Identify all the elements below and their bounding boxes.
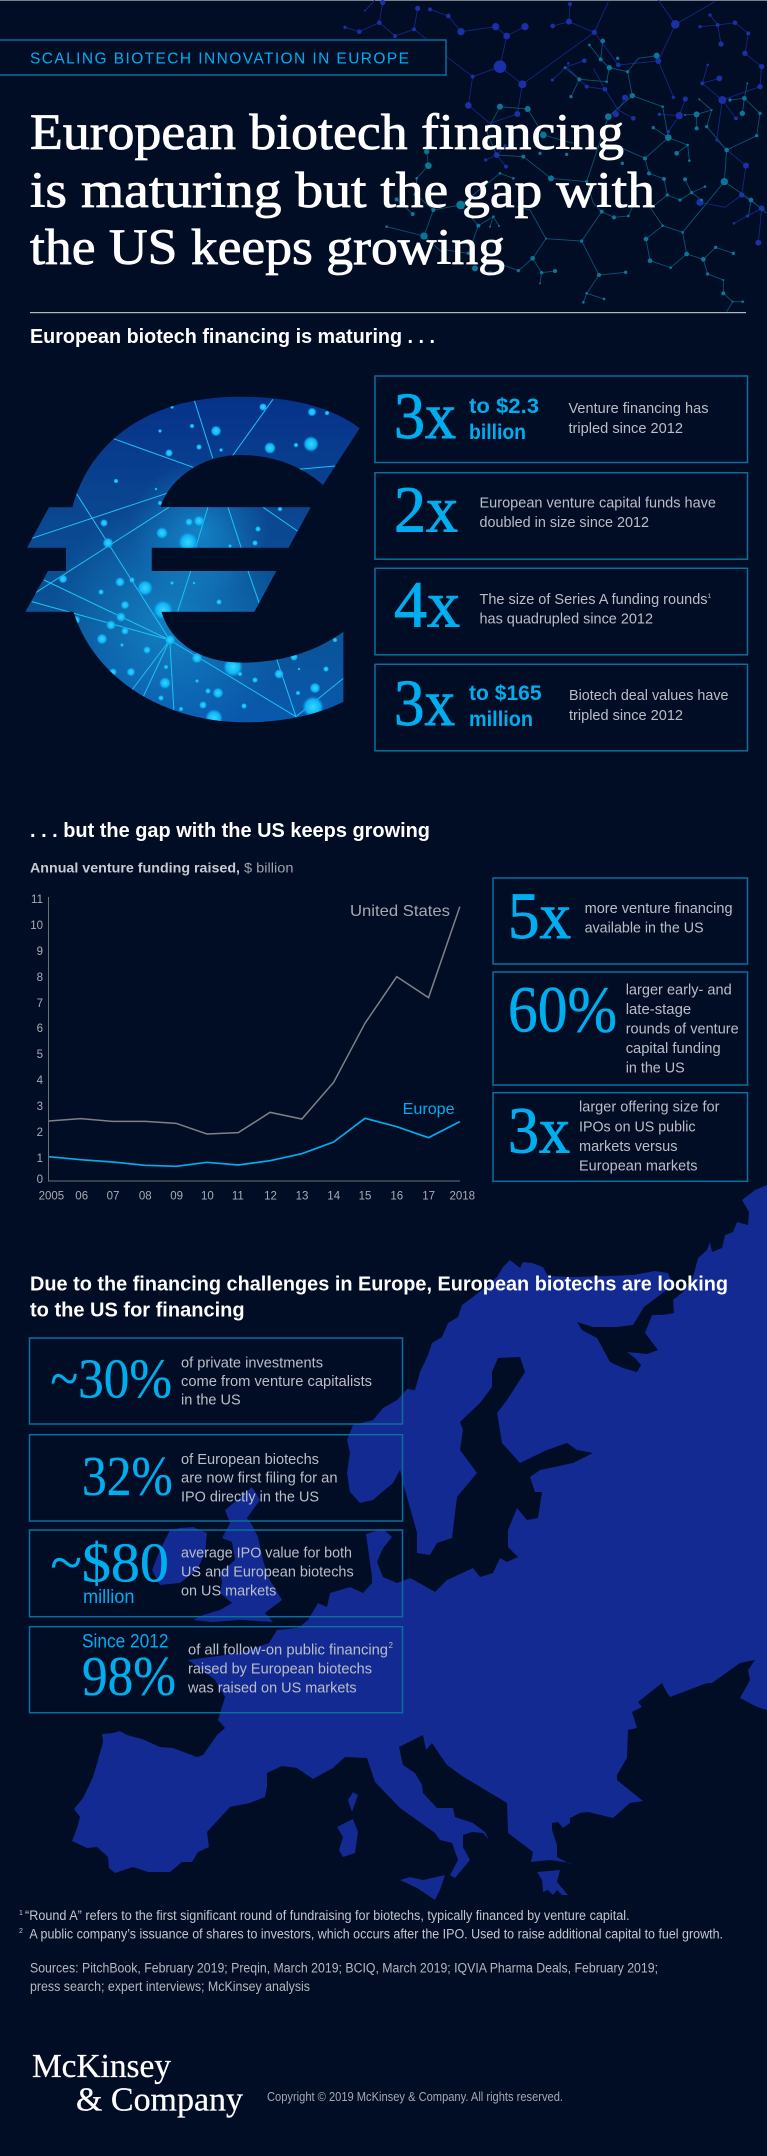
y axis labels: 7	[37, 998, 43, 1010]
y axis labels: 10	[30, 920, 43, 932]
heading: financing challenges: to the US for financing	[30, 1300, 245, 1322]
stat: 60%: late-stage	[626, 1001, 691, 1018]
Sicily	[400, 1875, 445, 1900]
stat: ~30%	[30, 1338, 402, 1424]
stat: 3x IPO: larger offering size for	[579, 1099, 720, 1116]
stat: ~30%: come from venture capitalists	[181, 1373, 372, 1390]
stat: venture financing: tripled since 2012	[568, 420, 683, 437]
map of Europe	[72, 1185, 767, 1900]
footnotes: 2	[19, 1928, 23, 1935]
stat: 98%: 98%	[82, 1646, 176, 1708]
stat: 60%: rounds of venture	[626, 1020, 739, 1037]
stat: deal values: 3x	[394, 667, 455, 740]
stat: 98%: was raised on US markets	[187, 1679, 357, 1696]
stat: 60%: larger early- and	[626, 981, 732, 998]
x axis labels: 12	[264, 1190, 277, 1202]
logo: & Company	[76, 2082, 243, 2119]
heading: maturing: European biotech financing is maturing . . .	[30, 326, 435, 348]
sources	[30, 1960, 658, 1994]
tag banner	[0, 40, 446, 75]
stat: deal values: million	[469, 708, 533, 731]
y axis labels: 1	[37, 1153, 43, 1165]
stat: 32%: of European biotechs	[181, 1451, 319, 1468]
x axis labels: 13	[296, 1190, 308, 1202]
stat: 5x: more venture financing	[585, 900, 733, 917]
stat: series A	[375, 568, 748, 655]
stat: deal values: tripled since 2012	[569, 707, 683, 724]
stat: 60%: capital funding	[626, 1040, 721, 1057]
stat: venture financing	[375, 376, 748, 462]
x axis labels: 09	[170, 1190, 183, 1202]
x axis labels: 06	[75, 1190, 88, 1202]
sources: Sources: PitchBook, February 2019; Preqin, March 2019; BCIQ, March 2019; IQVIA Pharma Deals, February 2019;	[30, 1960, 658, 1975]
stat: 32%	[30, 1435, 402, 1521]
molecular network decoration	[343, 0, 767, 312]
stat: ~30%: of private investments	[181, 1354, 323, 1371]
series: Europe	[49, 1118, 460, 1166]
stat: 98%: of all follow-on public financing	[188, 1642, 388, 1659]
stat: ~$80 million: average IPO value for both	[181, 1545, 352, 1562]
stat: 60%	[493, 972, 748, 1085]
y axis labels: 2	[37, 1127, 43, 1139]
x axis labels: 11	[232, 1190, 244, 1202]
chart title: $ billion	[244, 860, 294, 876]
footnotes: A public company’s issuance of shares to investors, which occurs after the IPO. Used to raise additional capital to fuel growth.	[29, 1927, 723, 1942]
Peloponnese	[537, 1870, 568, 1895]
Ireland	[152, 1527, 207, 1585]
stat: 5x: available in the US	[585, 920, 704, 937]
stat: 32%: are now first filing for an	[181, 1470, 338, 1487]
footnotes: 1	[19, 1910, 23, 1917]
stat: 98%: 2	[388, 1641, 394, 1650]
euro symbol	[20, 390, 365, 740]
stat: 3x IPO: markets versus	[579, 1138, 678, 1155]
y axis labels: 5	[37, 1049, 43, 1061]
stat: ~30%: in the US	[181, 1392, 241, 1409]
x axis labels: 2005	[39, 1190, 64, 1202]
x axis labels: 17	[422, 1190, 435, 1202]
title	[30, 105, 655, 276]
network lines	[29, 399, 343, 717]
x axis labels: 15	[359, 1190, 371, 1202]
label: Europe: Europe	[403, 1101, 455, 1118]
y axis labels: 11	[31, 894, 43, 906]
stat: fund size	[375, 473, 748, 559]
stat: 3x IPO: IPOs on US public	[579, 1119, 696, 1136]
y axis labels	[30, 894, 44, 1186]
teal network	[385, 39, 767, 312]
title: is maturing but the gap with	[30, 163, 655, 219]
stat: 32%: IPO directly in the US	[181, 1488, 319, 1505]
y axis labels: 8	[37, 972, 43, 984]
x axis labels: 16	[390, 1190, 403, 1202]
stat: 3x IPO: European markets	[579, 1158, 698, 1175]
stat: fund size: European venture capital funds have	[480, 495, 716, 512]
heading: financing challenges: Due to the financing challenges in Europe, European biotechs are looking	[30, 1274, 728, 1296]
stat: 5x: 5x	[508, 880, 571, 953]
glowing dots	[58, 403, 338, 727]
series: United States	[49, 907, 460, 1134]
y axis labels: 9	[37, 946, 43, 958]
stat: 98%: Since 2012	[82, 1631, 168, 1652]
stat: deal values: Biotech deal values have	[569, 687, 728, 704]
logo: McKinsey	[32, 2048, 171, 2085]
x axis labels: 10	[201, 1190, 214, 1202]
x axis labels	[39, 1190, 475, 1202]
stat: 98%: raised by European biotechs	[188, 1660, 372, 1677]
label: United States: United States	[350, 903, 450, 920]
stat: ~$80 million: on US markets	[181, 1582, 276, 1599]
footnotes: “Round A” refers to the first significant round of fundraising for biotechs, typically financed by venture capital.	[25, 1908, 630, 1923]
stat: series A: has quadrupled since 2012	[480, 611, 653, 628]
tag banner: SCALING BIOTECH INNOVATION IN EUROPE	[30, 50, 409, 68]
stat: ~$80 million: US and European biotechs	[181, 1564, 354, 1581]
title: the US keeps growing	[30, 220, 505, 276]
stat: venture financing: to $2.3	[469, 395, 539, 418]
stat: venture financing: 3x	[394, 380, 456, 453]
chart title: Annual venture funding raised,	[30, 860, 240, 876]
stat: venture financing: billion	[469, 421, 526, 444]
stat: ~30%: ~30%	[50, 1349, 172, 1411]
blue network	[343, 0, 765, 246]
footnotes	[19, 1908, 723, 1942]
Great Britain	[193, 1487, 282, 1622]
stat: series A: The size of Series A funding rounds	[480, 591, 708, 608]
y axis labels: 3	[37, 1101, 43, 1113]
stat: ~$80 million: ~$80	[50, 1533, 169, 1595]
stat: venture financing: Venture financing has	[568, 400, 708, 417]
stat: fund size: doubled in size since 2012	[480, 514, 649, 531]
y axis labels: 6	[37, 1023, 43, 1035]
stat: 60%: in the US	[626, 1059, 685, 1076]
sources: press search; expert interviews; McKinsey analysis	[30, 1979, 310, 1994]
Corsica	[348, 1792, 358, 1812]
stat: deal values: to $165	[469, 682, 542, 705]
stat: 3x IPO	[493, 1093, 748, 1181]
x axis labels: 14	[327, 1190, 341, 1202]
line chart	[30, 894, 475, 1202]
stat: fund size: 2x	[394, 474, 458, 547]
stat: ~$80 million: million	[83, 1587, 134, 1608]
stat: 60%: 60%	[508, 974, 617, 1047]
Sardinia	[337, 1819, 358, 1857]
mainland	[72, 1185, 767, 1878]
stat: 5x	[493, 878, 748, 964]
stat: 3x IPO: 3x	[508, 1095, 570, 1168]
stat: 98%	[30, 1627, 402, 1713]
stat: deal values	[375, 664, 748, 751]
title: European biotech financing	[30, 105, 624, 161]
stat: 32%: 32%	[82, 1446, 173, 1508]
stat: series A: 4x	[394, 569, 460, 642]
logo	[32, 2048, 243, 2119]
x axis labels: 08	[139, 1190, 152, 1202]
stat: series A: 1	[708, 593, 712, 600]
y axis labels: 0	[37, 1174, 43, 1186]
x axis labels: 07	[107, 1190, 119, 1202]
y axis labels: 4	[37, 1075, 44, 1087]
copyright: Copyright © 2019 McKinsey & Company. All rights reserved.	[267, 2090, 563, 2104]
heading: gap: . . . but the gap with the US keeps growing	[30, 820, 430, 842]
x axis labels: 2018	[450, 1190, 475, 1202]
heading: financing challenges	[30, 1274, 728, 1322]
stat: ~$80 million	[30, 1530, 402, 1617]
